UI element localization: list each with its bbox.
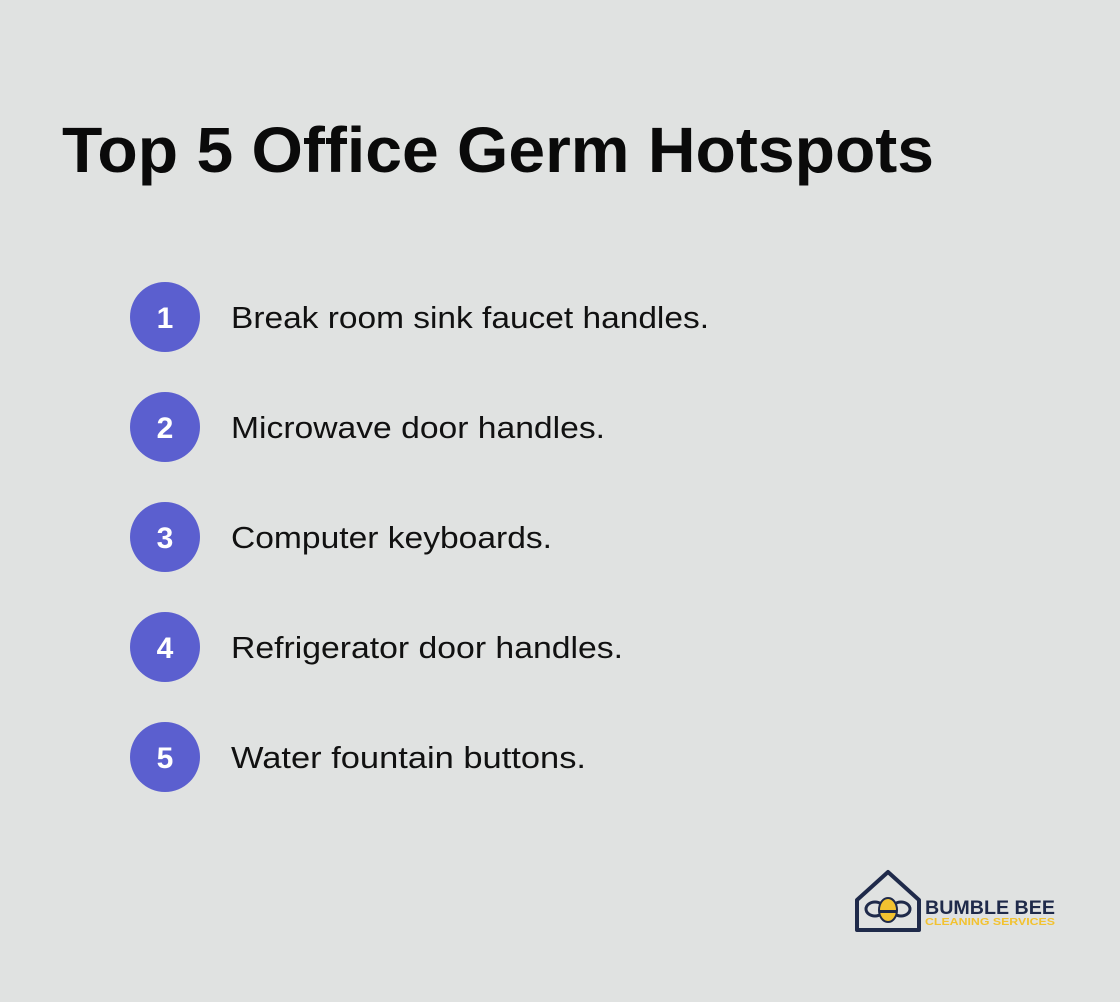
list item 5: Water fountain buttons. (231, 740, 586, 775)
list item 4: 4 (157, 632, 174, 665)
list item 3 (130, 502, 552, 572)
list item 3: 3 (157, 522, 173, 555)
logo text: BUMBLE BEE (925, 898, 1055, 919)
logo (857, 872, 1055, 930)
list item 5: 5 (157, 742, 173, 775)
list item 2: Microwave door handles. (231, 410, 605, 445)
title: Top 5 Office Germ Hotspots (62, 114, 934, 186)
list item 4 (130, 612, 623, 682)
list item 3: Computer keyboards. (231, 520, 552, 555)
list item 4: Refrigerator door handles. (231, 630, 623, 665)
list item 1: Break room sink faucet handles. (231, 300, 709, 335)
logo: CLEANING SERVICES (925, 917, 1055, 928)
list item 2 (130, 392, 605, 462)
icon: house bee (857, 872, 919, 930)
list item 5 (130, 722, 586, 792)
list item 1 (130, 282, 709, 352)
list item 2: 2 (157, 412, 173, 445)
list item 1: 1 (157, 302, 173, 335)
